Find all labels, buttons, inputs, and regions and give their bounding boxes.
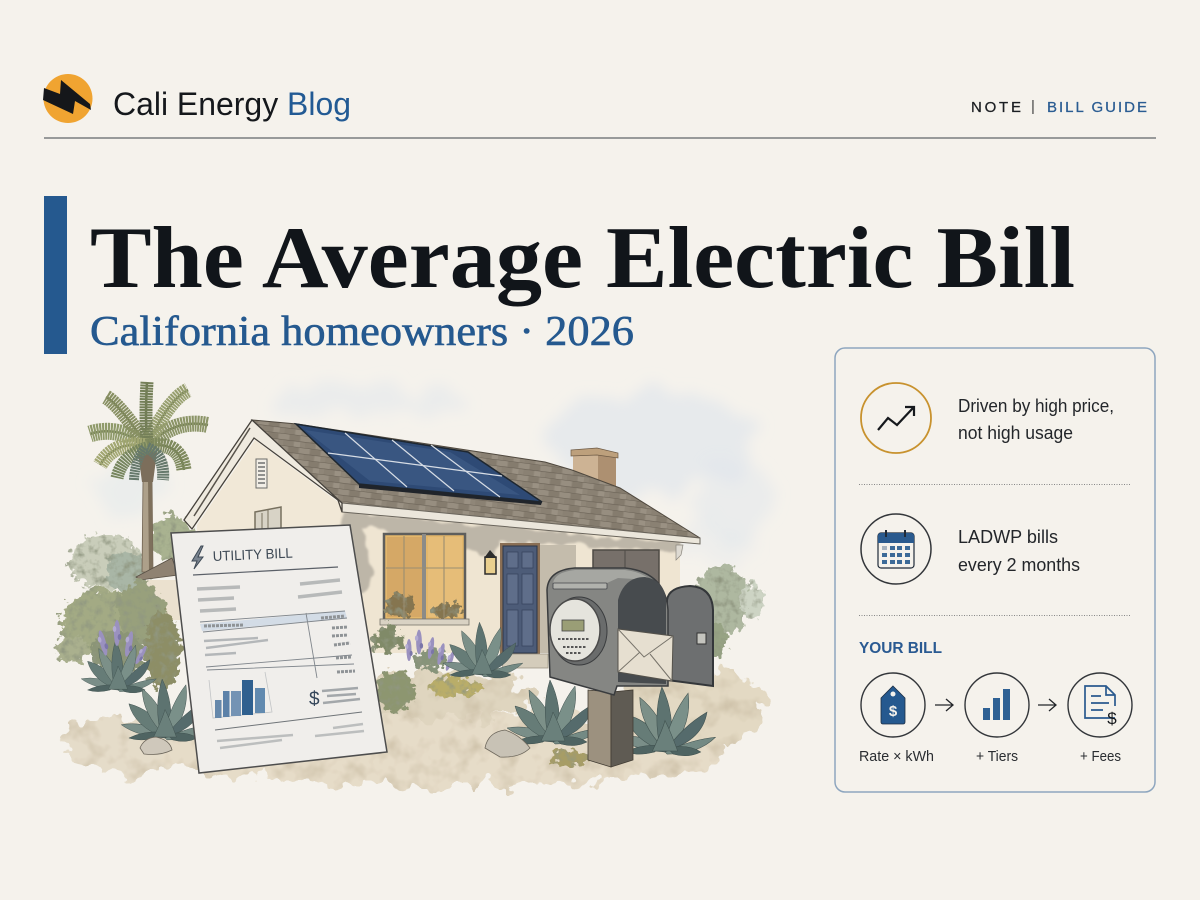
note tag <box>971 98 1147 116</box>
left foreground shrubs <box>56 582 211 754</box>
note tag: NOTE <box>971 99 1021 116</box>
open door <box>667 586 713 686</box>
text: billing cycle: LADWP bills <box>958 527 1058 547</box>
side wing wall <box>146 580 182 620</box>
title accent bar <box>44 196 67 354</box>
label: fees: + Fees <box>1080 749 1121 765</box>
icon: price tag: $ <box>889 703 898 720</box>
label: tiers: + Tiers <box>976 749 1018 765</box>
door step <box>500 654 548 668</box>
text: price driver line two: not high usage <box>958 423 1073 443</box>
icon: fee document <box>1068 673 1132 737</box>
text: price driver: Driven by high price, <box>958 396 1114 416</box>
icon: rising trend <box>861 383 931 453</box>
gable and wall <box>197 440 683 653</box>
logo mark <box>43 74 92 123</box>
icon: price tag <box>861 673 925 737</box>
arrow <box>935 699 953 711</box>
bill address lines <box>197 580 342 611</box>
panel: key facts <box>835 348 1155 792</box>
icon: fee document: $ <box>1107 709 1117 728</box>
chimney <box>571 448 618 488</box>
post <box>588 690 633 767</box>
utility bill document <box>171 525 387 773</box>
bill footer <box>215 712 364 748</box>
heading: your bill: YOUR BILL <box>859 640 942 657</box>
bill bolt icon <box>192 546 203 569</box>
brand name: Cali Energy Blog <box>113 86 351 122</box>
solar panels <box>296 424 542 505</box>
bill total: $ <box>309 689 320 710</box>
icon: calendar <box>861 514 931 584</box>
upper window <box>255 507 281 532</box>
note tag: | <box>1031 98 1035 115</box>
electric meter <box>550 597 607 665</box>
bill bar chart <box>209 672 272 718</box>
roof <box>184 420 700 544</box>
arrow <box>1038 699 1056 711</box>
bill table <box>200 611 355 678</box>
bill heading: UTILITY BILL <box>212 545 293 564</box>
ground wash <box>59 668 765 786</box>
right foreground plants <box>374 622 715 765</box>
mailbox flag rail <box>553 583 607 589</box>
mailbox body <box>547 568 668 695</box>
gable vent <box>256 459 267 488</box>
bill total <box>309 688 360 710</box>
wall lantern <box>484 550 497 574</box>
front door <box>500 543 540 655</box>
title: The Average Electric Bill <box>90 210 1075 307</box>
window <box>380 534 469 625</box>
envelope <box>618 629 673 681</box>
sky wash <box>90 390 770 567</box>
side wing roof <box>136 558 178 580</box>
subtitle: California homeowners · 2026 <box>90 309 634 355</box>
garage door <box>593 550 659 590</box>
mailbox roof highlight <box>553 570 664 600</box>
background shrubs <box>70 516 764 658</box>
label: rate times usage: Rate × kWh <box>859 749 934 765</box>
interior <box>618 577 666 684</box>
note tag: BILL GUIDE <box>1047 99 1147 116</box>
text: billing cycle line two: every 2 months <box>958 555 1080 575</box>
palm tree <box>90 382 208 572</box>
mailbox with electric meter <box>547 568 713 767</box>
illustration: house scene <box>56 382 770 786</box>
icon: tier bars <box>965 673 1029 737</box>
